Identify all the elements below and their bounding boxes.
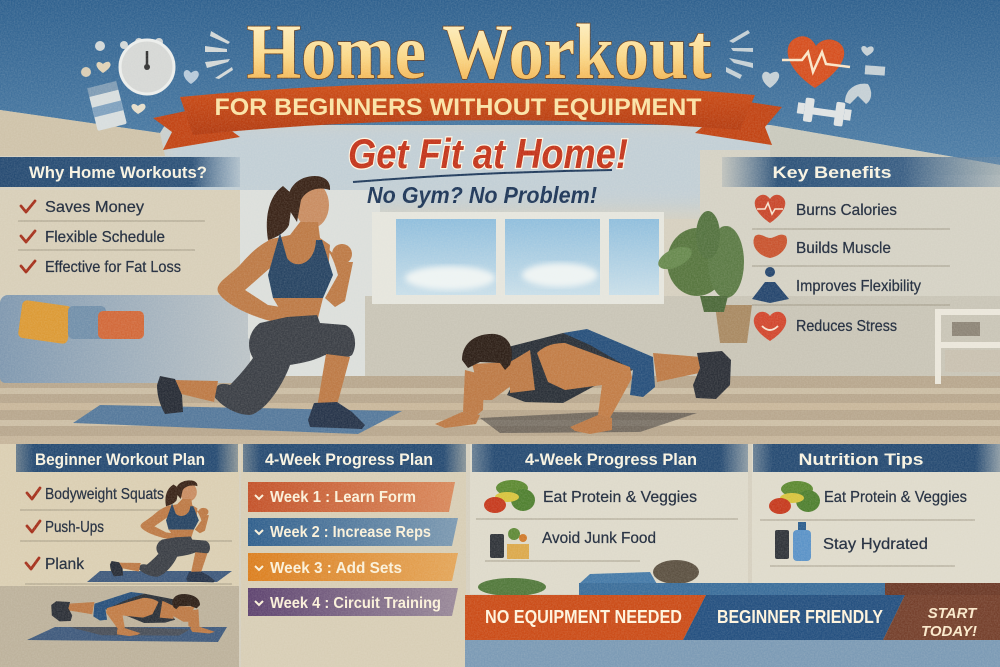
- list: Builds Muscle: [796, 240, 891, 257]
- banner: call to action: BEGINNER FRIENDLY: [717, 607, 883, 627]
- heading: 4-Week Progress Plan: [525, 450, 697, 469]
- icon: junk food: [490, 528, 529, 559]
- window: [372, 212, 664, 304]
- list: Reduces Stress: [796, 318, 897, 335]
- heading: Key Benefits: [772, 163, 892, 182]
- icon: dumbbell: [796, 96, 853, 128]
- week 4: Week 4 : Circuit Training: [270, 595, 441, 612]
- heading: [243, 444, 466, 472]
- week 3: [248, 553, 458, 581]
- icons: small hearts and bursts right: [726, 30, 885, 104]
- man doing push-up: [435, 329, 731, 434]
- icon: heart with pulse: [782, 36, 850, 88]
- icons: small hearts and bursts left: [81, 31, 233, 114]
- title ribbon: [153, 83, 782, 150]
- heading: Beginner Workout Plan: [35, 450, 205, 469]
- shelf: [938, 312, 1000, 384]
- panel: why home workouts: [0, 157, 240, 276]
- panel: key benefits: [722, 157, 1000, 341]
- week 1: [248, 482, 455, 512]
- list: Push-Ups: [45, 519, 104, 536]
- icon: water bottle: [87, 81, 127, 131]
- wall below window: [365, 296, 1000, 376]
- panel: 4-week progress plan weeks: [241, 444, 466, 667]
- subtitle: No Gym? No Problem!: [367, 182, 597, 208]
- greenery, mat and rock: [478, 560, 699, 596]
- list: Bodyweight Squats: [45, 486, 164, 503]
- week 4: [248, 588, 458, 616]
- heading: [16, 444, 238, 472]
- banner: call to action: NO EQUIPMENT NEEDED: [485, 607, 682, 627]
- banner: call to action: [465, 583, 1000, 640]
- list: [18, 199, 205, 276]
- icon: stopwatch: [120, 38, 174, 94]
- week 3: Week 3 : Add Sets: [270, 560, 402, 577]
- week 2: [248, 518, 458, 546]
- panel: food tips: Avoid Junk Food: [542, 530, 656, 547]
- list: Plank: [45, 556, 85, 573]
- heading: 4-Week Progress Plan: [265, 450, 433, 469]
- woman lunging: [157, 176, 365, 429]
- heading: [0, 157, 240, 187]
- subtitle: [348, 130, 628, 208]
- title: Home Workout: [246, 8, 712, 95]
- icon: vegetables: [484, 480, 535, 513]
- week 1: Week 1 : Learn Form: [270, 489, 416, 506]
- banner: call to action: TODAY!: [921, 623, 977, 640]
- sofa: [0, 295, 250, 383]
- week 2: Week 2 : Increase Reps: [270, 524, 431, 541]
- icon: water bottle and cup: [775, 522, 811, 561]
- list: Improves Flexibility: [796, 278, 921, 295]
- list: [20, 486, 232, 584]
- title ribbon: FOR BEGINNERS WITHOUT EQUIPMENT: [214, 94, 702, 121]
- list: Saves Money: [45, 199, 144, 216]
- plant: [655, 211, 752, 343]
- icon: vegetables: [769, 481, 820, 514]
- heading: [753, 444, 1000, 472]
- heading: Nutrition Tips: [798, 450, 924, 469]
- mini figure: push-up: [27, 592, 227, 642]
- mini figure: lunge: [87, 480, 232, 582]
- list: Effective for Fat Loss: [45, 259, 181, 276]
- heading: [472, 444, 748, 472]
- banner: call to action: START: [928, 605, 978, 622]
- panel: food tips: Eat Protein & Veggies: [543, 489, 697, 506]
- panel: nutrition tips: Eat Protein & Veggies: [824, 489, 967, 506]
- panel: beginner workout plan: [0, 444, 239, 667]
- list: [752, 195, 950, 341]
- heading: Why Home Workouts?: [29, 163, 207, 182]
- list: Flexible Schedule: [45, 229, 165, 246]
- bottom strip background: [465, 640, 1000, 667]
- subtitle: Get Fit at Home!: [348, 130, 628, 177]
- panel: nutrition tips: Stay Hydrated: [823, 536, 928, 553]
- panel: nutrition tips: [752, 444, 1000, 584]
- room scene: [0, 211, 1000, 444]
- floor: [0, 376, 1000, 444]
- list: Burns Calories: [796, 202, 897, 219]
- heading: [722, 157, 1000, 187]
- panel: food tips: [470, 444, 748, 596]
- exercise mat: [73, 405, 402, 434]
